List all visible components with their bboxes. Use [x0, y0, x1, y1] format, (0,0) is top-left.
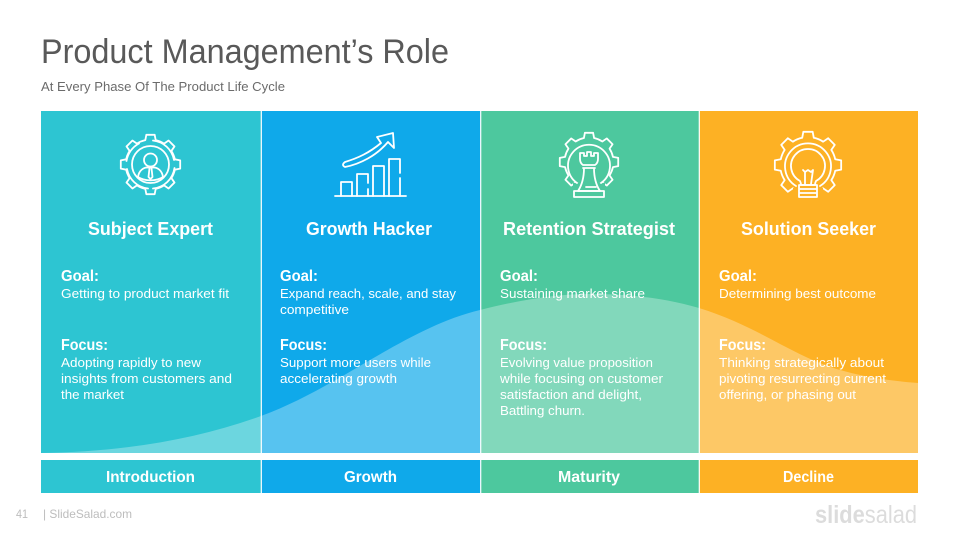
phase band: decline [700, 460, 918, 493]
goal: Sustaining market share [500, 286, 645, 301]
phase band: introduction [41, 460, 261, 493]
focus: insights from customers and [61, 371, 232, 386]
focus: the market [61, 387, 124, 402]
heading: Subject Expert [88, 218, 213, 239]
focus: satisfaction and delight, [500, 387, 642, 402]
panel: growth hacker [280, 133, 456, 386]
goal: Goal: [280, 268, 318, 285]
goal: Expand reach, scale, and stay [280, 286, 456, 301]
phase band: introduction: Introduction [106, 469, 195, 486]
focus [61, 337, 232, 402]
focus: Evolving value proposition [500, 355, 653, 370]
focus: while focusing on customer [499, 371, 664, 386]
heading: Growth Hacker [306, 218, 432, 239]
focus: Thinking strategically about [719, 355, 884, 370]
focus: offering, or phasing out [719, 387, 856, 402]
product life cycle curve [41, 294, 918, 453]
icon: gear with chess rook [560, 133, 618, 198]
focus: pivoting resurrecting current [719, 371, 886, 386]
goal: Getting to product market fit [61, 286, 229, 301]
heading: Solution Seeker [741, 218, 876, 239]
icon: bar chart with arrow [335, 133, 406, 196]
icon: gear with light bulb [775, 132, 841, 200]
goal: Goal: [61, 268, 99, 285]
focus [280, 337, 431, 386]
subtitle: At Every Phase Of The Product Life Cycle [41, 79, 285, 94]
focus: Focus: [280, 337, 327, 354]
page number: 41 [16, 507, 28, 521]
phase band: growth [262, 460, 480, 493]
panel: retention strategist [499, 133, 675, 418]
focus: Battling churn. [500, 403, 585, 418]
phase band: growth: Growth [344, 469, 397, 486]
footer site: | SlideSalad.com [43, 507, 132, 521]
goal: Determining best outcome [719, 286, 876, 301]
phase band: maturity: Maturity [558, 469, 620, 486]
logo wordmark: slidesalad [815, 501, 917, 529]
icon: gear with person [121, 135, 180, 194]
panel backgrounds [41, 111, 918, 453]
goal: Goal: [719, 268, 757, 285]
goal: competitive [280, 302, 349, 317]
focus: Focus: [719, 337, 766, 354]
goal [719, 268, 876, 301]
focus: Support more users while [280, 355, 431, 370]
focus: Focus: [61, 337, 108, 354]
panel: solution seeker [719, 132, 886, 402]
focus: accelerating growth [280, 371, 397, 386]
focus: Focus: [500, 337, 547, 354]
focus [499, 337, 664, 418]
panel: subject expert [61, 135, 232, 402]
goal [61, 268, 229, 301]
goal: Goal: [500, 268, 538, 285]
heading: Retention Strategist [503, 218, 675, 239]
phase band: decline: Decline [783, 469, 834, 486]
focus [719, 337, 886, 402]
title: Product Management’s Role [41, 33, 449, 71]
focus: Adopting rapidly to new [61, 355, 202, 370]
phase band: maturity [481, 460, 699, 493]
goal [500, 268, 645, 301]
goal [280, 268, 456, 317]
